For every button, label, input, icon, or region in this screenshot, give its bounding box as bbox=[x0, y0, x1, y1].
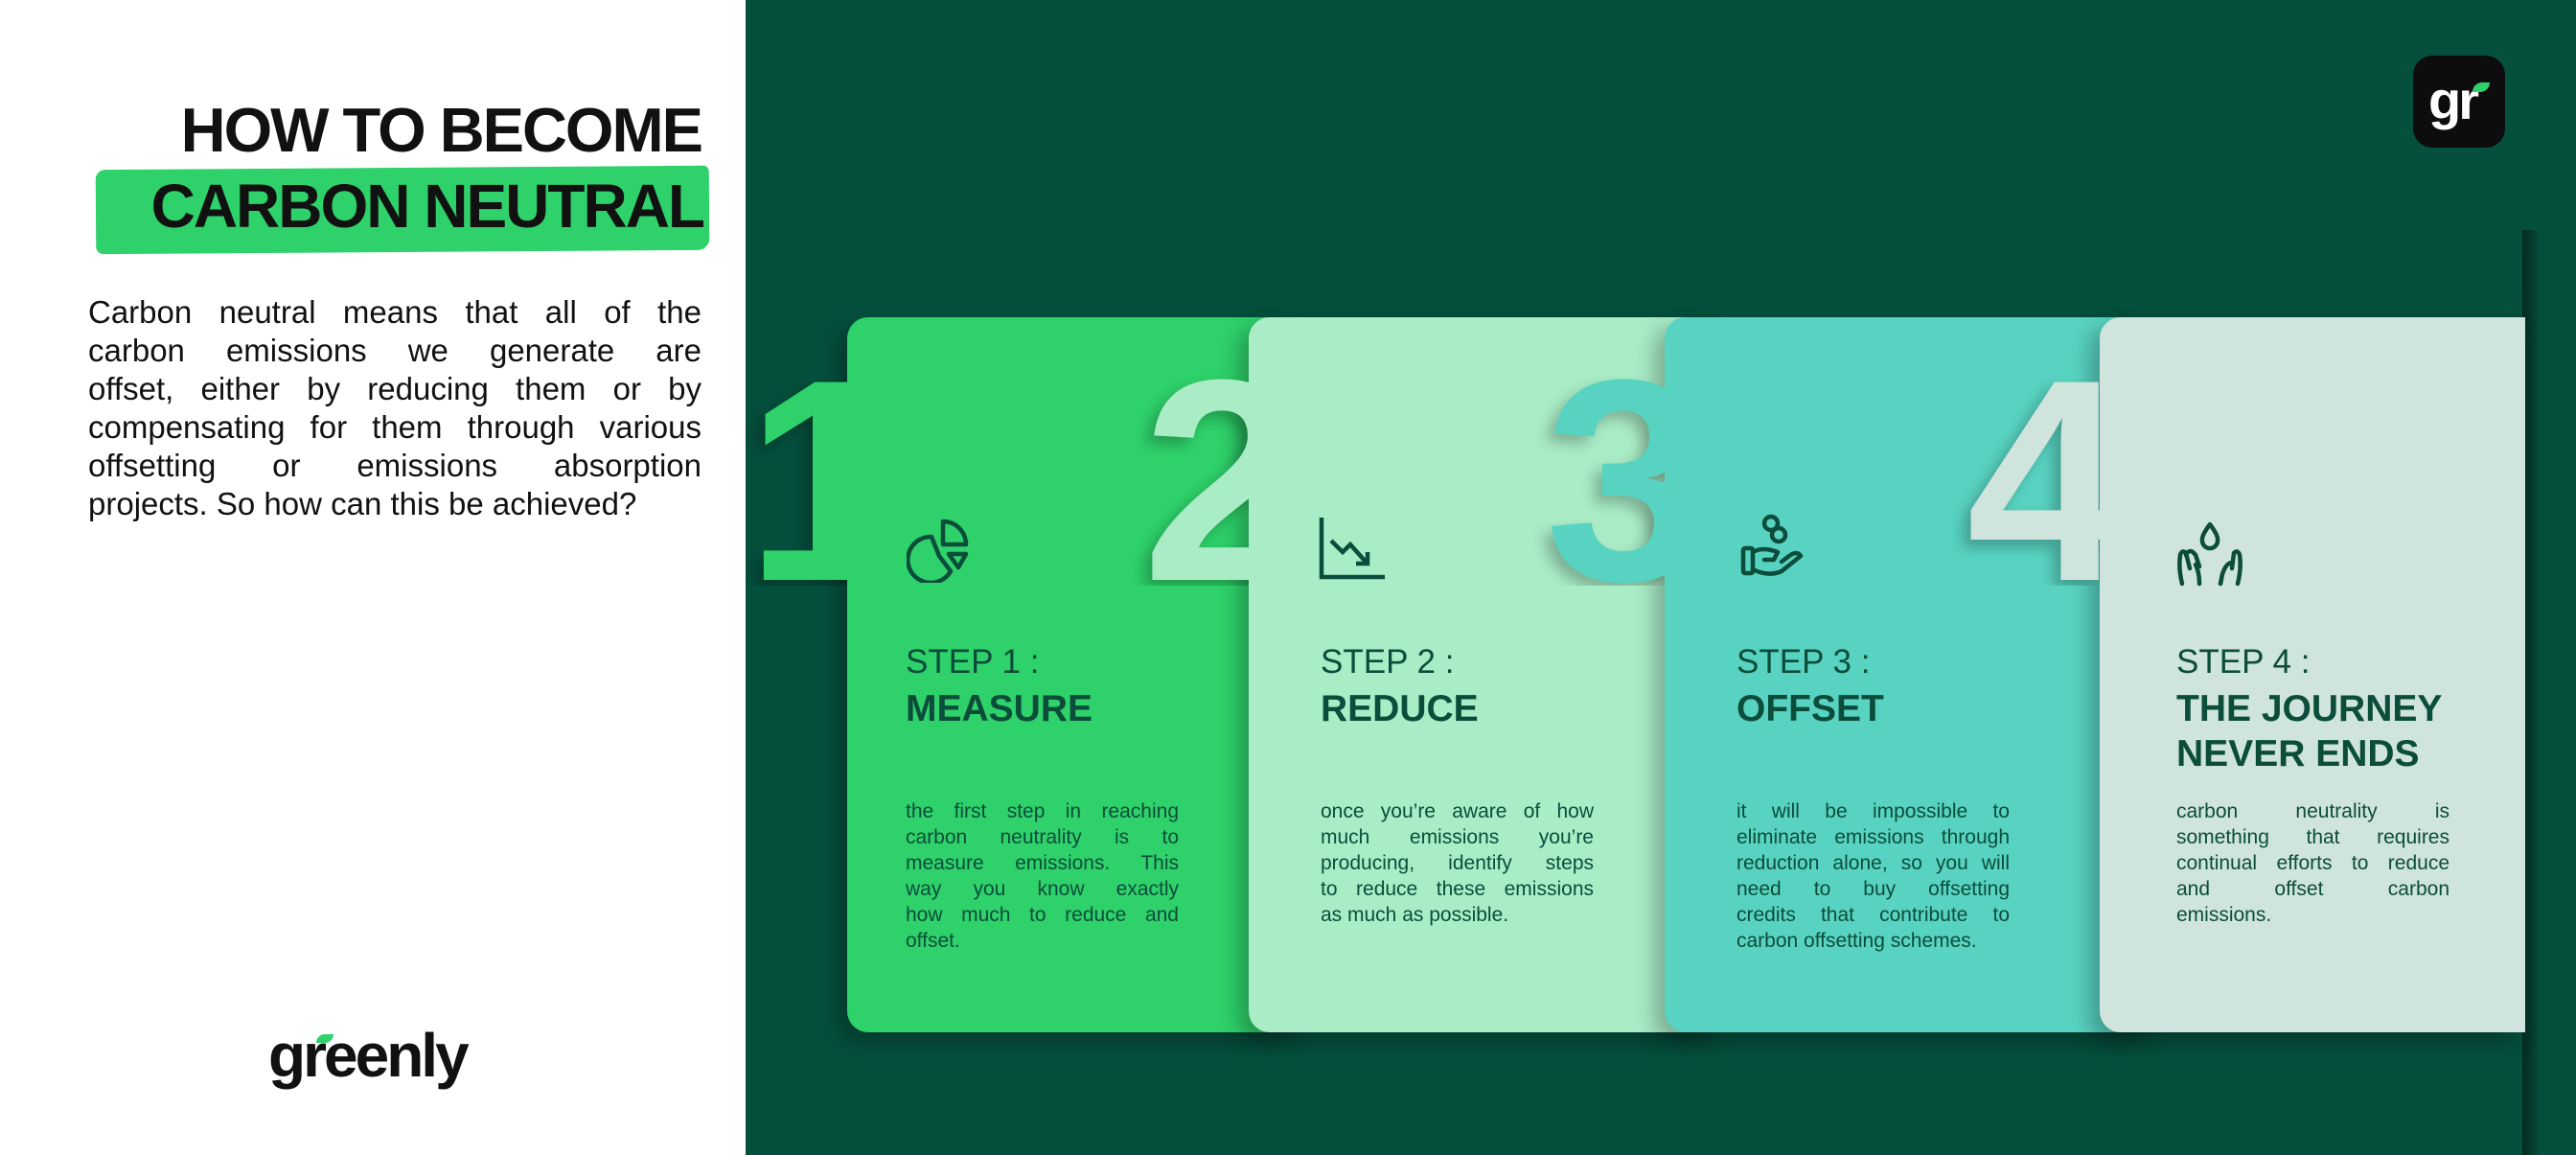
step 2 description: as much as possible. bbox=[1321, 904, 1508, 926]
step 2 description: once you’re aware of how bbox=[1321, 800, 1594, 822]
step 4 title bbox=[2176, 688, 2442, 774]
right shadow strip bbox=[2522, 230, 2540, 1155]
intro paragraph: offsetting or emissions absorption bbox=[88, 448, 702, 483]
greenly logo: greenly bbox=[268, 1021, 467, 1090]
card 1 bbox=[847, 317, 1307, 1032]
title line 2: CARBON NEUTRAL bbox=[151, 172, 703, 241]
intro paragraph: carbon emissions we generate are bbox=[88, 333, 702, 368]
step 2 description: to reduce these emissions bbox=[1321, 878, 1594, 900]
left panel bbox=[0, 0, 746, 1155]
step 3 description: carbon offsetting schemes. bbox=[1736, 930, 1977, 952]
step 4 description bbox=[2176, 800, 2450, 926]
step 4 title: THE JOURNEY bbox=[2176, 688, 2442, 729]
step 4 description: emissions. bbox=[2176, 904, 2271, 926]
intro paragraph: offset, either by reducing them or by bbox=[88, 371, 702, 406]
step 3 title: OFFSET bbox=[1736, 688, 1884, 729]
step 1 description: how much to reduce and bbox=[906, 904, 1179, 926]
step 3 description: eliminate emissions through bbox=[1736, 826, 2010, 848]
card 3 bbox=[1665, 317, 2163, 1032]
icon: hands with drop bbox=[2177, 521, 2242, 587]
step 1 description: measure emissions. This bbox=[906, 852, 1179, 874]
title highlight bbox=[96, 166, 709, 254]
icon: pie chart bbox=[907, 520, 968, 583]
step 1 description: offset. bbox=[906, 930, 960, 952]
step 1 description: carbon neutrality is to bbox=[906, 826, 1179, 848]
step 4 label: STEP 4 : bbox=[2176, 643, 2310, 681]
logo badge: gr bbox=[2428, 70, 2476, 130]
step 3 label: STEP 3 : bbox=[1736, 643, 1870, 681]
logo badge bbox=[2413, 56, 2505, 148]
step 3 description: credits that contribute to bbox=[1736, 904, 2010, 926]
step 2 description: much emissions you’re bbox=[1321, 826, 1594, 848]
step 3 description: reduction alone, so you will bbox=[1736, 852, 2010, 874]
step 2 description: producing, identify steps bbox=[1321, 852, 1594, 874]
card 4 bbox=[2100, 317, 2525, 1032]
step 4 description: something that requires bbox=[2176, 826, 2450, 848]
step 1 description: way you know exactly bbox=[906, 878, 1179, 900]
step 4 description: continual efforts to reduce bbox=[2176, 852, 2450, 874]
step 4 title: NEVER ENDS bbox=[2176, 733, 2420, 774]
step 1 description: the first step in reaching bbox=[906, 800, 1179, 822]
step 2 title: REDUCE bbox=[1321, 688, 1479, 729]
step 4 description: carbon neutrality is bbox=[2176, 800, 2450, 822]
step 1 description bbox=[906, 800, 1179, 952]
card 2 bbox=[1249, 317, 1728, 1032]
intro paragraph bbox=[88, 294, 702, 521]
step 3 description bbox=[1736, 800, 2010, 952]
intro paragraph: Carbon neutral means that all of the bbox=[88, 294, 702, 330]
step 2 label: STEP 2 : bbox=[1321, 643, 1454, 681]
step 3 description: need to buy offsetting bbox=[1736, 878, 2010, 900]
step 2 description bbox=[1321, 800, 1595, 926]
step 3 description: it will be impossible to bbox=[1736, 800, 2010, 822]
step 4 description: and offset carbon bbox=[2176, 878, 2450, 900]
title line 1: HOW TO BECOME bbox=[181, 95, 702, 165]
step 1 label: STEP 1 : bbox=[906, 643, 1039, 681]
intro paragraph: projects. So how can this be achieved? bbox=[88, 486, 636, 521]
icon: descending chart bbox=[1319, 518, 1385, 579]
icon: hand with coins bbox=[1740, 514, 1804, 576]
step 1 title: MEASURE bbox=[906, 688, 1092, 729]
intro paragraph: compensating for them through various bbox=[88, 409, 702, 445]
